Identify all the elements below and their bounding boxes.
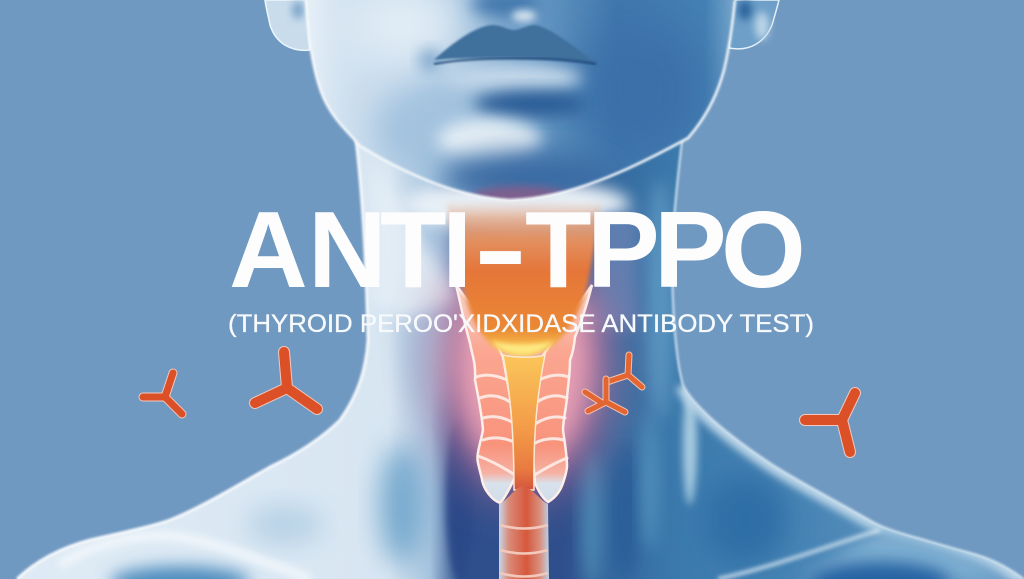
under-chin pale area [400,179,630,231]
right thyroid lobe [532,285,592,502]
antibody: right of thyroid, upper [607,355,642,387]
face: chin and mouth [300,0,740,206]
figure: neck and shoulders [0,130,1024,579]
antibody: far right [805,393,855,452]
icon: right ear [729,0,779,49]
lips [434,25,596,63]
right neck tones [683,385,697,505]
lobe ribs [476,375,569,476]
subtitle: (THYROID PEROO'XIDXIDASE ANTIBODY TEST) [228,310,814,338]
isthmus highlight [492,340,552,354]
mouth line [434,58,596,64]
title: – [481,213,520,291]
icon: left ear [265,0,310,50]
trachea [499,486,549,579]
pink glow around the thyroid [435,245,611,495]
central channel [503,355,545,490]
left thyroid lobe [456,285,515,503]
antibody: large left [255,352,317,409]
title: ANTI [229,189,472,311]
antibody: small far left [143,373,182,414]
thyroid illustration [446,200,602,579]
orange gland body [446,200,602,357]
antibody: right of thyroid, lower [585,379,625,412]
left neck tones [402,190,454,410]
title: TPPO [525,189,806,311]
